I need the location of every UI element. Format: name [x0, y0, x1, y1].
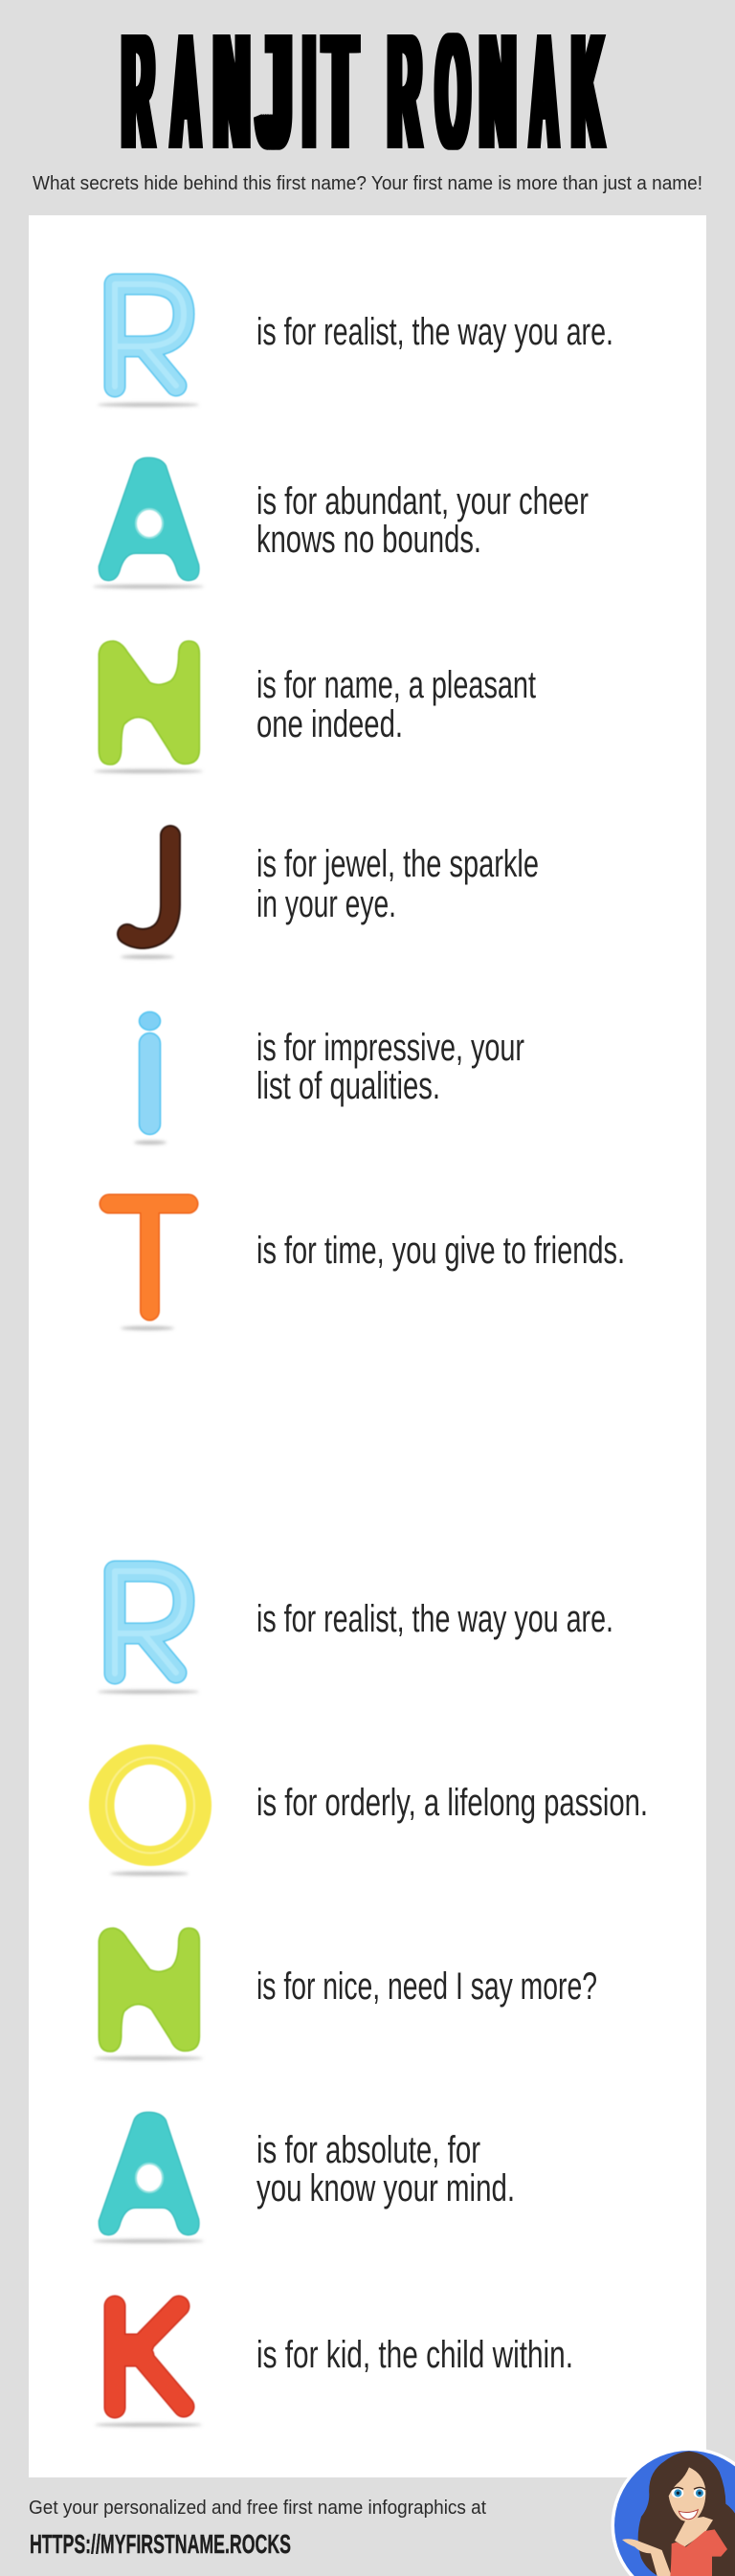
footer url: HTTPS://MYFIRSTNAME.ROCKS	[30, 2529, 291, 2559]
icon: letter A	[93, 457, 204, 588]
icon: letter N	[94, 641, 203, 773]
text: A second	[256, 2129, 515, 2210]
title	[121, 0, 607, 184]
title: J	[258, 0, 291, 184]
row: R second	[98, 1571, 613, 1694]
subtitle: What secrets hide behind this first name? Your first name is more than just a name!	[33, 173, 702, 194]
icon: letter A	[93, 2112, 204, 2243]
title: N	[214, 0, 249, 184]
text: A	[256, 480, 589, 561]
row: T	[109, 1204, 625, 1330]
text: A: knows no bounds.	[256, 519, 481, 561]
icon: avatar	[611, 2448, 735, 2576]
icon: letter K	[95, 2306, 202, 2427]
text: A second: is for absolute, for	[256, 2129, 480, 2171]
icon: letter J	[121, 835, 174, 959]
text: J: is for jewel, the sparkle	[256, 843, 539, 885]
title: K	[572, 0, 604, 184]
text: N: one indeed.	[256, 703, 403, 745]
title: R	[122, 0, 154, 184]
title: A	[170, 0, 200, 184]
icon: letter T	[109, 1204, 189, 1330]
title: N	[480, 0, 515, 184]
title: A	[530, 0, 558, 184]
row: O	[89, 1744, 648, 1876]
row: N	[94, 641, 536, 773]
row: K	[95, 2306, 573, 2427]
text: I: is for impressive, your	[256, 1027, 524, 1069]
text: N	[256, 664, 536, 745]
title: T	[323, 0, 356, 184]
row: I	[134, 1012, 524, 1144]
title: R	[389, 0, 421, 184]
text: J	[256, 843, 539, 925]
icon: letter R	[98, 284, 199, 407]
icon: letter O	[89, 1744, 212, 1876]
footer text: Get your personalized and free first name infographics at	[29, 2498, 486, 2519]
text: I: list of qualities.	[256, 1065, 440, 1107]
row: N second	[94, 1928, 597, 2060]
icon: letter R	[98, 1571, 199, 1694]
row: R	[98, 284, 613, 407]
text: N: is for name, a pleasant	[256, 664, 536, 706]
title: I	[302, 0, 315, 184]
row: A second	[93, 2112, 515, 2243]
text: N second: is for nice, need I say more?	[256, 1965, 597, 2008]
row: J	[121, 835, 539, 959]
text: K: is for kid, the child within.	[256, 2334, 573, 2376]
text: A: is for abundant, your cheer	[256, 480, 589, 522]
icon: letter i	[134, 1012, 167, 1144]
title: O	[436, 0, 469, 184]
text: A second: you know your mind.	[256, 2167, 515, 2210]
row: A	[93, 457, 589, 588]
icon: letter N	[94, 1928, 203, 2060]
text: I	[256, 1027, 524, 1107]
text: J: in your eye.	[256, 883, 396, 925]
